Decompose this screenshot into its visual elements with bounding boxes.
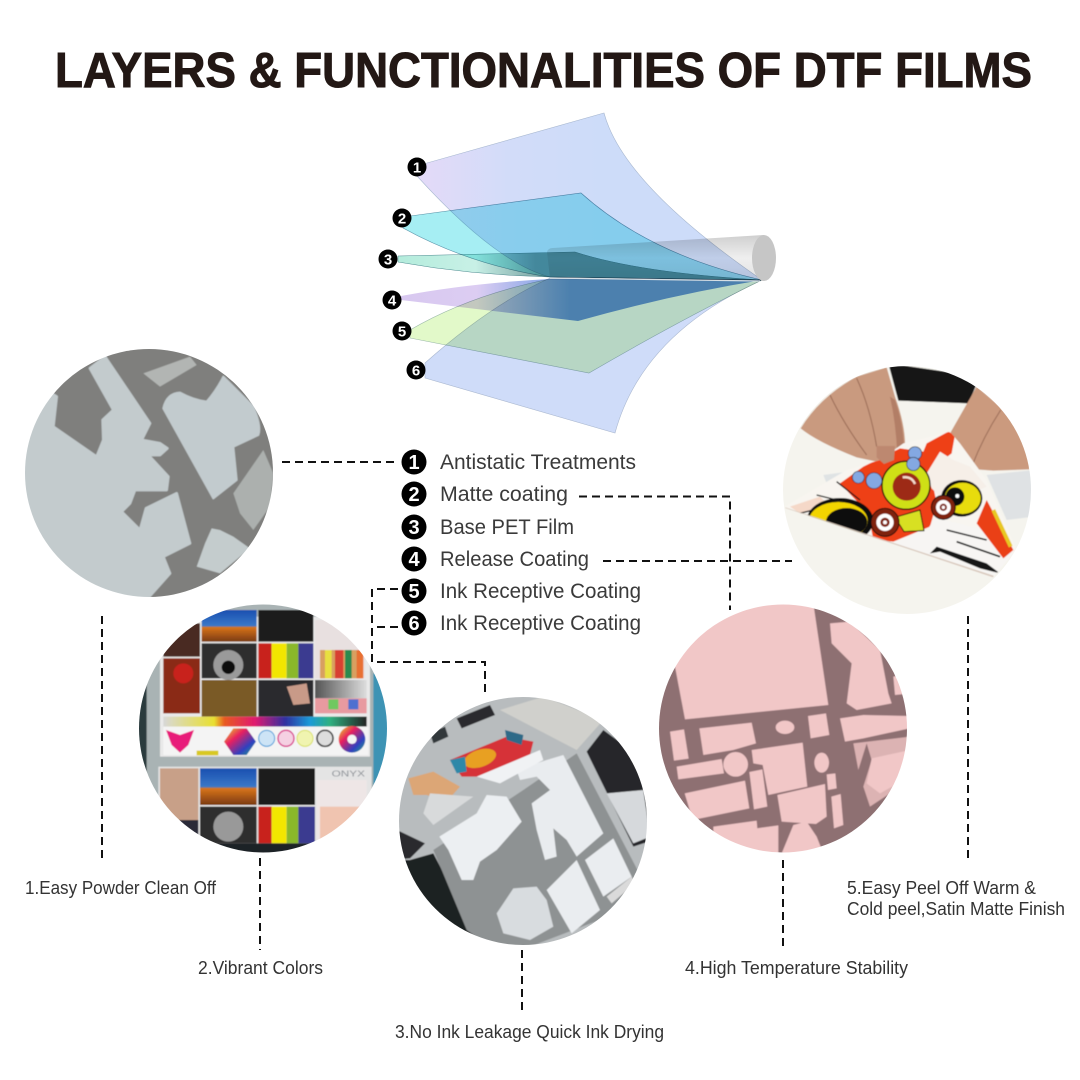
left small eye: [871, 508, 899, 536]
fold line: [785, 508, 993, 577]
dashed leader: photo 3 label: [521, 950, 523, 1015]
dashed connector: ink receptive to photo 3: [372, 589, 485, 697]
light transfer shape right: [163, 377, 259, 498]
flower shape: [197, 528, 250, 573]
diagram number 1: [408, 158, 426, 176]
sheet 1 images: [160, 610, 370, 757]
right hand: [950, 387, 1031, 471]
bear shape: [830, 622, 892, 710]
sheet 2 images: [158, 767, 372, 853]
roll end: [752, 235, 776, 281]
fabric shading: [824, 472, 841, 482]
caption 5: [847, 878, 1065, 919]
roller: [457, 705, 495, 728]
side edges: [372, 673, 387, 786]
photo 4: pink film: [657, 603, 910, 860]
dashed connector: layer 6 branch: [372, 626, 398, 628]
legend 1: 1: [408, 452, 420, 474]
legend 5: Ink Receptive Coating: [440, 579, 641, 603]
brand mark: ONYX: [332, 769, 365, 779]
left hand: [801, 367, 905, 462]
photo 2: colour test print: [137, 603, 390, 853]
caption 3: 3.No Ink Leakage Quick Ink Drying: [395, 1022, 664, 1042]
caption 2: 2.Vibrant Colors: [198, 958, 323, 978]
left fur strokes: [800, 482, 860, 513]
printed artwork: [450, 737, 533, 777]
legend 6: Ink Receptive Coating: [440, 611, 641, 635]
dark background top: [888, 363, 980, 403]
beard: [928, 524, 931, 528]
lion artwork folded: [785, 431, 1014, 578]
diagram number 3: 3: [384, 252, 392, 268]
top right white fur: [926, 451, 962, 492]
large pink sheet: [670, 603, 828, 719]
left eye: [807, 497, 873, 535]
dashed connector: matte coating to photo 4: [579, 496, 730, 610]
white film shapes: [439, 795, 522, 880]
roll body: [547, 235, 764, 281]
sheet 2: [403, 193, 762, 280]
happy lettering: [143, 357, 197, 387]
dashed connector: release coating to photo 5: [603, 560, 792, 562]
pink fur tint: [790, 496, 824, 513]
layer legend list: [402, 450, 641, 636]
sheet 6: [425, 278, 762, 433]
right small eye: [931, 495, 955, 519]
caption 5: 5.Easy Peel Off Warm &: [847, 878, 1036, 898]
legend 4: 4: [408, 549, 420, 571]
sheet 5: [410, 279, 762, 373]
orange artwork: [408, 771, 460, 796]
dashed leader: photo 2 label: [259, 858, 261, 950]
dark base left: [405, 853, 476, 936]
photo 1: powder on film: [25, 349, 273, 597]
top blue beads: [907, 447, 922, 471]
diagram number 5: [392, 322, 412, 340]
left fingertip: [877, 446, 895, 464]
dashed connector: antistatic to photo 1: [282, 461, 398, 463]
pink paper blocks: [670, 713, 843, 860]
diagram number 6: [406, 360, 426, 380]
legend 3: Base PET Film: [440, 515, 574, 539]
legend 3: 3: [408, 517, 420, 539]
grey film: [433, 753, 638, 947]
right eye: [941, 480, 982, 517]
legend 5: 5: [408, 581, 420, 603]
sheet 1: [417, 113, 762, 280]
diagram number 2: [392, 208, 412, 228]
red face: [840, 432, 955, 542]
caption 1: 1.Easy Powder Clean Off: [25, 878, 217, 898]
machine top right: [500, 697, 603, 750]
diagram number 4: 4: [388, 292, 397, 310]
photo 5: peeling transfer: [780, 363, 1040, 620]
caption 5: Cold peel,Satin Matte Finish: [847, 899, 1065, 919]
diagram number 4: [382, 290, 402, 310]
dashed leader: photo 1 label: [101, 616, 103, 862]
diagram number 1: 1: [413, 160, 421, 176]
dashed leader: photo 4 label: [782, 860, 784, 946]
bottom right character: [840, 715, 910, 742]
splash icons: [776, 721, 794, 734]
legend 2: Matte coating: [440, 482, 568, 506]
light transfer shapes left: [20, 357, 190, 603]
diagram number 5: 5: [398, 324, 406, 340]
legend 4: Release Coating: [440, 547, 589, 571]
green cheek: [895, 510, 924, 532]
diagram number 3: [378, 250, 398, 268]
sheet 4: [401, 279, 762, 321]
dashed leader: photo 5 label: [967, 616, 969, 862]
centre seam: [550, 278, 760, 281]
legend 2: 2: [408, 484, 420, 506]
diagram number 6: 6: [412, 362, 420, 380]
blue beads: [852, 471, 882, 489]
legend 6: 6: [408, 613, 420, 635]
diagram number 2: 2: [398, 210, 406, 228]
caption 4: 4.High Temperature Stability: [685, 958, 908, 978]
film layers diagram: [378, 113, 776, 433]
sheet 3: [398, 252, 762, 280]
sketch artwork: [233, 450, 273, 530]
dark machine right: [587, 730, 653, 847]
right cheek red and gold: [977, 500, 1013, 558]
jewel: [882, 461, 930, 509]
photo 3: printer output: [399, 697, 647, 945]
legend 1: Antistatic Treatments: [440, 450, 636, 474]
